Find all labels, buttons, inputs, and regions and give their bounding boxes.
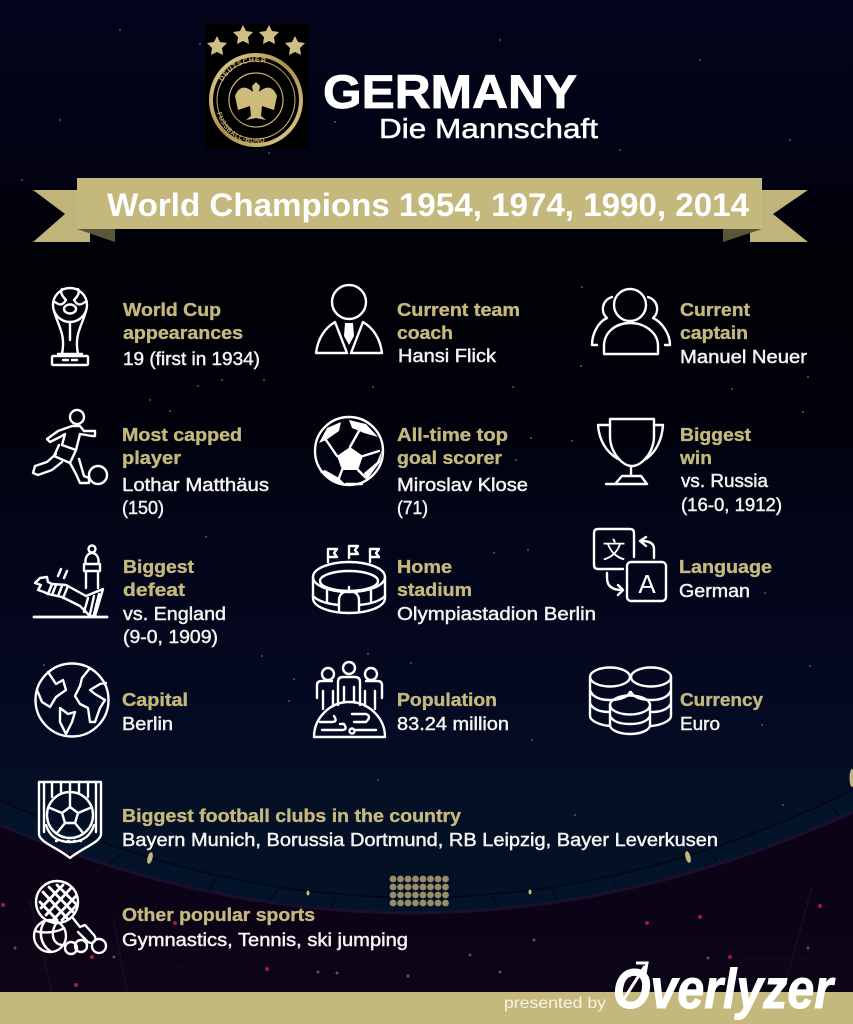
subtitle: Die Mannschaft <box>379 113 598 144</box>
stat: all-time top goal scorer <box>315 417 528 518</box>
stat: most capped player: Lothar Matthäus <box>122 475 269 495</box>
icon: globe <box>36 664 108 736</box>
icon: football club shield <box>39 782 101 858</box>
stat: capital <box>36 664 188 736</box>
stat: population: Population <box>397 690 497 710</box>
stat: World Cup appearances <box>52 288 260 369</box>
icon: group of three people <box>592 289 670 354</box>
stat: all-time top goal scorer: goal scorer <box>397 448 502 468</box>
stat: biggest defeat <box>34 546 226 647</box>
stat: biggest football clubs: Bayern Munich, Borussia Dortmund, RB Leipzig, Bayer Leverkusen <box>122 830 718 850</box>
banner text: World Champions 1954, 1974, 1990, 2014 <box>107 187 749 223</box>
stat: biggest win: Biggest <box>680 425 751 445</box>
stat: biggest win <box>598 419 782 515</box>
stat: other popular sports: Gymnastics, Tennis, ski jumping <box>122 930 408 950</box>
stat: current captain <box>592 289 807 367</box>
stat: current captain: Current <box>680 300 750 320</box>
presented by: presented by <box>504 995 606 1012</box>
stat: language: Language <box>679 557 772 577</box>
stat: currency <box>590 668 763 734</box>
icon: racket and balls <box>34 881 106 954</box>
stat: home stadium: Olympiastadion Berlin <box>397 604 596 624</box>
stat: current team coach: coach <box>397 323 453 343</box>
stat: all-time top goal scorer: (71) <box>397 498 428 518</box>
stat: population <box>314 662 509 737</box>
stat: language <box>594 529 772 601</box>
stat: home stadium: Home <box>397 557 452 577</box>
icon: stacks of coins <box>590 668 671 734</box>
icon: footballer kicking ball <box>33 410 107 484</box>
logo: German Football Association crest <box>205 24 308 149</box>
stat: home stadium: stadium <box>397 580 472 600</box>
starfield <box>21 29 811 816</box>
stat: capital: Capital <box>122 690 188 710</box>
icon: translate: A <box>638 569 656 599</box>
stat: most capped player: player <box>122 448 181 468</box>
icon: coach in suit <box>316 285 382 353</box>
stat: biggest defeat: defeat <box>123 580 185 600</box>
logo: German Football Association crest: FUSSBALL-BUND <box>217 112 264 143</box>
stat: most capped player <box>33 410 269 518</box>
icon: trophy cup <box>598 419 663 484</box>
stat: biggest football clubs: Biggest football clubs in the country <box>122 806 461 826</box>
logo: German Football Association crest: DEUTSCHER <box>218 57 266 82</box>
stat: capital: Berlin <box>122 714 173 734</box>
icon: world cup trophy <box>52 288 88 365</box>
stat: biggest defeat: vs. England <box>123 604 226 624</box>
footer bar <box>0 992 853 1024</box>
stat: World Cup appearances: World Cup <box>123 300 221 320</box>
stat: most capped player: (150) <box>122 498 164 518</box>
stat: current team coach <box>316 285 520 366</box>
stat: biggest win: win <box>679 448 712 468</box>
stat: World Cup appearances: appearances <box>123 323 243 343</box>
stat: biggest win: (16-0, 1912) <box>681 495 782 515</box>
stat: current team coach: Current team <box>397 300 520 320</box>
stars <box>207 25 305 55</box>
icon: people on a planet <box>314 662 385 737</box>
stat: all-time top goal scorer: All-time top <box>397 425 508 445</box>
icon: soccer ball <box>315 417 383 485</box>
title: GERMANY <box>323 65 577 118</box>
icon: translate: 文 <box>602 537 626 563</box>
stadium roof and stands <box>0 769 853 1024</box>
icon: translate <box>594 529 666 601</box>
stat: current captain: Manuel Neuer <box>680 347 807 367</box>
stat: population: 83.24 million <box>397 714 509 734</box>
stat: biggest defeat: (9-0, 1909) <box>123 627 218 647</box>
stat: language: German <box>679 581 750 601</box>
stat: other popular sports <box>34 881 408 954</box>
stat: biggest win: vs. Russia <box>681 471 769 491</box>
stat: currency: Euro <box>680 714 720 734</box>
stat: other popular sports: Other popular sports <box>122 905 315 925</box>
stat: biggest defeat: Biggest <box>123 557 194 577</box>
icon: fallen chess king <box>34 546 107 617</box>
stat: current captain: captain <box>680 323 748 343</box>
stat: currency: Currency <box>680 690 763 710</box>
floodlights <box>390 876 449 906</box>
stat: most capped player: Most capped <box>122 425 242 445</box>
icon: stadium with flags <box>313 546 385 613</box>
stat: World Cup appearances: 19 (first in 1934) <box>123 349 260 369</box>
stat: all-time top goal scorer: Miroslav Klose <box>397 475 528 495</box>
stat: home stadium <box>313 546 596 624</box>
stat: current team coach: Hansi Flick <box>398 346 497 366</box>
banner ribbon <box>33 178 808 242</box>
stat: biggest football clubs <box>39 782 718 858</box>
